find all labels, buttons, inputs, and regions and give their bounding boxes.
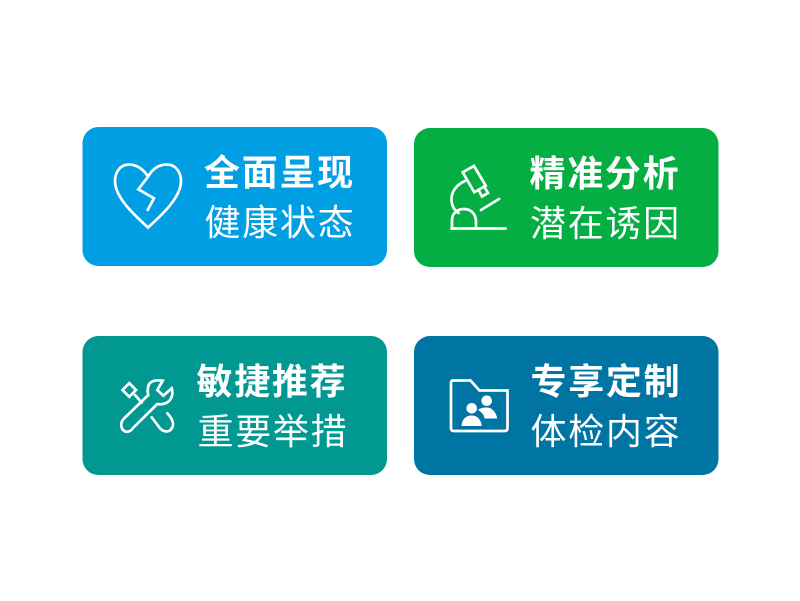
icon: wrench and screwdriver: [121, 380, 173, 432]
heading: 敏捷推荐: 敏捷推荐: [196, 361, 347, 402]
icon: microscope: [452, 166, 506, 228]
text: 潜在诱因: 潜在诱因: [530, 203, 681, 244]
heading: 专享定制: 专享定制: [530, 361, 681, 402]
panel: agile recommendation of key measures: [82, 336, 387, 475]
panel: full presentation of health status: [82, 127, 387, 266]
text: 体检内容: 体检内容: [530, 411, 681, 452]
text: 重要举措: 重要举措: [198, 411, 348, 452]
icon: broken heart: [115, 164, 181, 228]
text: 健康状态: 健康状态: [204, 202, 355, 243]
panel: exclusive customised checkup content: [414, 336, 718, 475]
icon: folder with people: [451, 380, 508, 431]
panel: precise analysis of underlying causes: [414, 128, 718, 267]
heading: 全面呈现: 全面呈现: [204, 152, 355, 193]
heading: 精准分析: 精准分析: [530, 153, 680, 194]
